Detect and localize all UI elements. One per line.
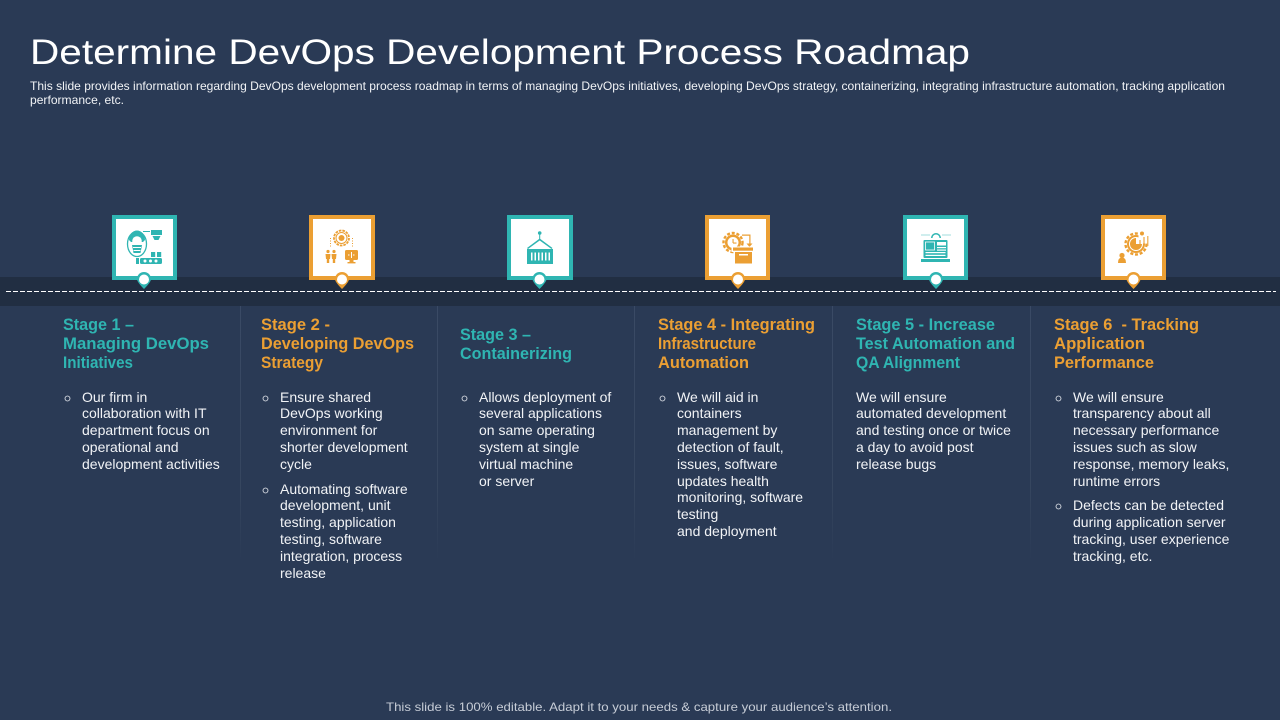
text: stage 6: during application server	[1073, 514, 1226, 530]
text: stage 2: Ensure shared	[280, 389, 371, 405]
heading: stage 2	[261, 316, 414, 372]
text: stage 6: tracking, etc.	[1073, 548, 1152, 564]
icon: hanging shipping container	[527, 231, 553, 264]
heading: stage 6: Performance	[1054, 354, 1154, 372]
heading: stage 3: Stage 3 –	[460, 326, 531, 344]
text: stage 2: cycle	[280, 456, 312, 472]
text: stage 5: and testing once or twice	[856, 422, 1011, 438]
text: stage 4: testing	[677, 506, 718, 522]
subtitle: This slide provides information regarding DevOps development process roadmap in terms of managing DevOps initiatives, developing DevOps strategy, containerizing, integrating infrastructure automation, tracking application	[30, 79, 1225, 93]
text: stage 6: tracking, user experience	[1073, 531, 1230, 547]
heading: stage 1: Stage 1 –	[63, 316, 134, 334]
text: stage 6: necessary performance	[1073, 422, 1220, 438]
heading: stage 3: Containerizing	[460, 345, 572, 363]
text: stage 3: Allows deployment of	[479, 389, 611, 405]
heading: stage 6: Stage 6 - Tracking	[1054, 316, 1199, 334]
text: stage 2: Automating software	[280, 481, 408, 497]
pin: stage 2	[335, 272, 349, 289]
column dividers	[240, 306, 1031, 562]
text: stage 1: development activities	[82, 456, 220, 472]
heading: stage 5: QA Alignment	[856, 354, 960, 372]
icon: gear with chart and person	[1118, 231, 1148, 263]
footer note: This slide is 100% editable. Adapt it to your needs & capture your audience’s attention.	[386, 700, 892, 714]
text: stage 3	[462, 389, 611, 489]
icon box: stage 4	[707, 217, 768, 278]
heading: stage 2: Stage 2 -	[261, 316, 330, 334]
text: stage 6: response, memory leaks,	[1073, 456, 1229, 472]
icon: gear, people and code screen	[326, 230, 358, 263]
text: stage 2: testing, software	[280, 531, 382, 547]
icon: gorilla head with bulb and conveyor	[128, 230, 162, 264]
text: stage 2: shorter development	[280, 439, 408, 455]
heading: stage 1	[63, 316, 209, 372]
text: stage 2: testing, application	[280, 514, 396, 530]
icon box: stage 1	[114, 217, 175, 278]
text: stage 6: runtime errors	[1073, 473, 1160, 489]
text: stage 4: issues, software	[677, 456, 778, 472]
pin: stage 3	[532, 272, 546, 289]
heading: stage 6: Application	[1054, 335, 1145, 353]
text: stage 1	[65, 389, 220, 472]
heading: stage 4: Automation	[658, 354, 749, 372]
text: stage 2: development, unit	[280, 497, 391, 513]
heading: stage 3	[460, 326, 572, 363]
text: stage 5: a day to avoid post	[856, 439, 974, 455]
text: stage 3: or server	[479, 473, 535, 489]
text: stage 5: release bugs	[856, 456, 936, 472]
icon: laptop with test dashboard	[921, 233, 951, 262]
text: stage 5	[856, 389, 1011, 472]
heading: stage 6	[1054, 316, 1199, 372]
text: stage 3: system at single	[479, 439, 580, 455]
text: stage 6: transparency about all	[1073, 405, 1211, 421]
text: stage 6: We will ensure	[1073, 389, 1164, 405]
text: stage 6	[1056, 389, 1230, 564]
text: stage 2: integration, process	[280, 548, 402, 564]
heading: stage 1: Managing DevOps	[63, 335, 209, 353]
heading: stage 5	[856, 316, 1015, 372]
text: stage 4: We will aid in	[677, 389, 758, 405]
icon box: stage 2	[311, 217, 373, 278]
heading: stage 5: Test Automation and	[856, 335, 1015, 353]
heading: stage 2: Developing DevOps	[261, 335, 414, 353]
text: stage 3: virtual machine	[479, 456, 573, 472]
subtitle	[30, 79, 1225, 107]
heading: stage 2: Strategy	[261, 354, 324, 372]
text: stage 1: department focus on	[82, 422, 210, 438]
text: stage 6: Defects can be detected	[1073, 497, 1224, 513]
icon box: stage 3	[509, 217, 571, 278]
text: stage 4	[660, 389, 803, 539]
text: stage 3: several applications	[479, 405, 602, 421]
icon box: stage 5	[905, 217, 966, 278]
heading: stage 4	[658, 316, 815, 372]
heading: stage 4: Stage 4 - Integrating	[658, 316, 815, 334]
text: stage 2: environment for	[280, 422, 378, 438]
text: stage 2: release	[280, 565, 326, 581]
text: stage 4: and deployment	[677, 523, 777, 539]
text: stage 5: We will ensure	[856, 389, 947, 405]
text: stage 6: issues such as slow	[1073, 439, 1198, 455]
pin: stage 4	[731, 272, 745, 289]
text: stage 3: on same operating	[479, 422, 595, 438]
timeline band	[0, 277, 1280, 306]
text: stage 4: updates health	[677, 473, 769, 489]
heading: stage 4: Infrastructure	[658, 335, 756, 353]
icon: gear clock and box	[724, 233, 754, 264]
pin: stage 6	[1126, 272, 1140, 289]
pin: stage 5	[929, 272, 943, 289]
text: stage 1: collaboration with IT	[82, 405, 207, 421]
subtitle: performance, etc.	[30, 93, 124, 107]
title: Determine DevOps Development Process Roadmap	[30, 32, 970, 72]
text: stage 2	[263, 389, 408, 581]
text: stage 2: DevOps working	[280, 405, 383, 421]
icon box: stage 6	[1103, 217, 1164, 278]
text: stage 1: Our firm in	[82, 389, 147, 405]
text: stage 5: automated development	[856, 405, 1006, 421]
heading: stage 5: Stage 5 - Increase	[856, 316, 995, 334]
text: stage 4: detection of fault,	[677, 439, 784, 455]
heading: stage 1: Initiatives	[63, 354, 133, 372]
text: stage 1: operational and	[82, 439, 179, 455]
text: stage 4: containers	[677, 405, 742, 421]
text: stage 4: management by	[677, 422, 777, 438]
pin: stage 1	[137, 272, 151, 289]
text: stage 4: monitoring, software	[677, 489, 803, 505]
